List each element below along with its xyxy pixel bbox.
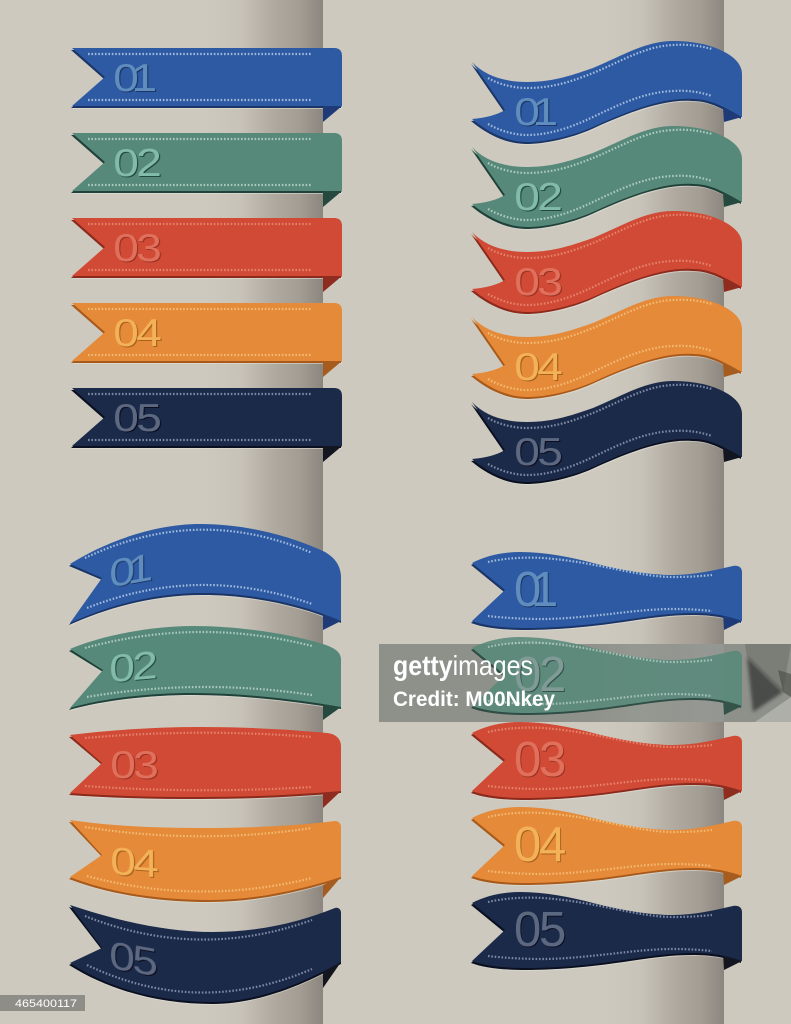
ribbon 03 wave	[471, 211, 742, 315]
ribbon 03 arc: 03	[110, 743, 159, 787]
image id tag: 465400117	[15, 998, 77, 1010]
ribbon 04 fish: 04	[514, 818, 566, 872]
ribbon 03 flat	[71, 218, 342, 292]
ribbon 02 flat: 02	[113, 141, 162, 185]
image id tag	[0, 995, 85, 1011]
ribbon 05 wave: 05	[514, 430, 563, 474]
ribbon 01 wave	[471, 41, 742, 145]
ribbon 04 fish	[471, 807, 742, 886]
ribbon 01 arc: 01	[109, 545, 153, 596]
panel: arc ribbons	[69, 524, 341, 1005]
ribbon 04 arc	[69, 820, 341, 903]
ribbon 01 flat: 01	[113, 56, 157, 100]
ribbon 01 fish: 01	[514, 563, 558, 617]
right column	[606, 0, 724, 1024]
ribbon 05 fish: 05	[514, 903, 566, 957]
ribbon 05 fish	[471, 892, 742, 971]
panel: flat ribbons	[71, 48, 342, 462]
ribbon 05 flat: 05	[113, 396, 162, 440]
ribbon 04 flat: 04	[113, 311, 162, 355]
panel: wave ribbons	[471, 41, 742, 485]
watermark logo: gettyimages	[393, 650, 533, 681]
ribbon 05 wave	[471, 381, 742, 485]
ribbon 02 wave: 02	[514, 175, 563, 219]
ribbon 04 wave	[471, 296, 742, 400]
watermark band	[379, 644, 791, 722]
watermark credit: Credit: M00Nkey	[393, 688, 555, 711]
ribbon 01 flat	[71, 48, 342, 122]
ribbon 01 arc	[69, 524, 341, 630]
ribbon 04 arc: 04	[110, 839, 159, 886]
ribbon 03 arc	[69, 727, 341, 808]
ribbon 05 arc: 05	[109, 933, 158, 985]
ribbon 02 fish	[471, 637, 742, 715]
ribbon 01 wave: 01	[514, 90, 558, 134]
ribbon 03 wave: 03	[514, 260, 563, 304]
ribbon 05 arc	[69, 905, 341, 1005]
ribbon 02 wave	[471, 126, 742, 230]
left column	[205, 0, 323, 1024]
ribbon 03 fish: 03	[514, 733, 566, 787]
ribbon 02 arc: 02	[109, 643, 158, 691]
ribbon 02 fish: 02	[514, 648, 566, 702]
ribbon 04 flat	[71, 303, 342, 377]
ribbon 02 flat	[71, 133, 342, 207]
watermark text	[393, 650, 555, 711]
ribbon 05 flat	[71, 388, 342, 462]
ribbon 01 fish	[471, 552, 742, 631]
panel: fish-tail ribbons	[471, 552, 742, 971]
ribbon 02 arc	[69, 626, 341, 720]
ribbon 03 flat: 03	[113, 226, 162, 270]
ribbon 04 wave: 04	[514, 345, 563, 389]
ribbon 03 fish	[471, 722, 742, 801]
